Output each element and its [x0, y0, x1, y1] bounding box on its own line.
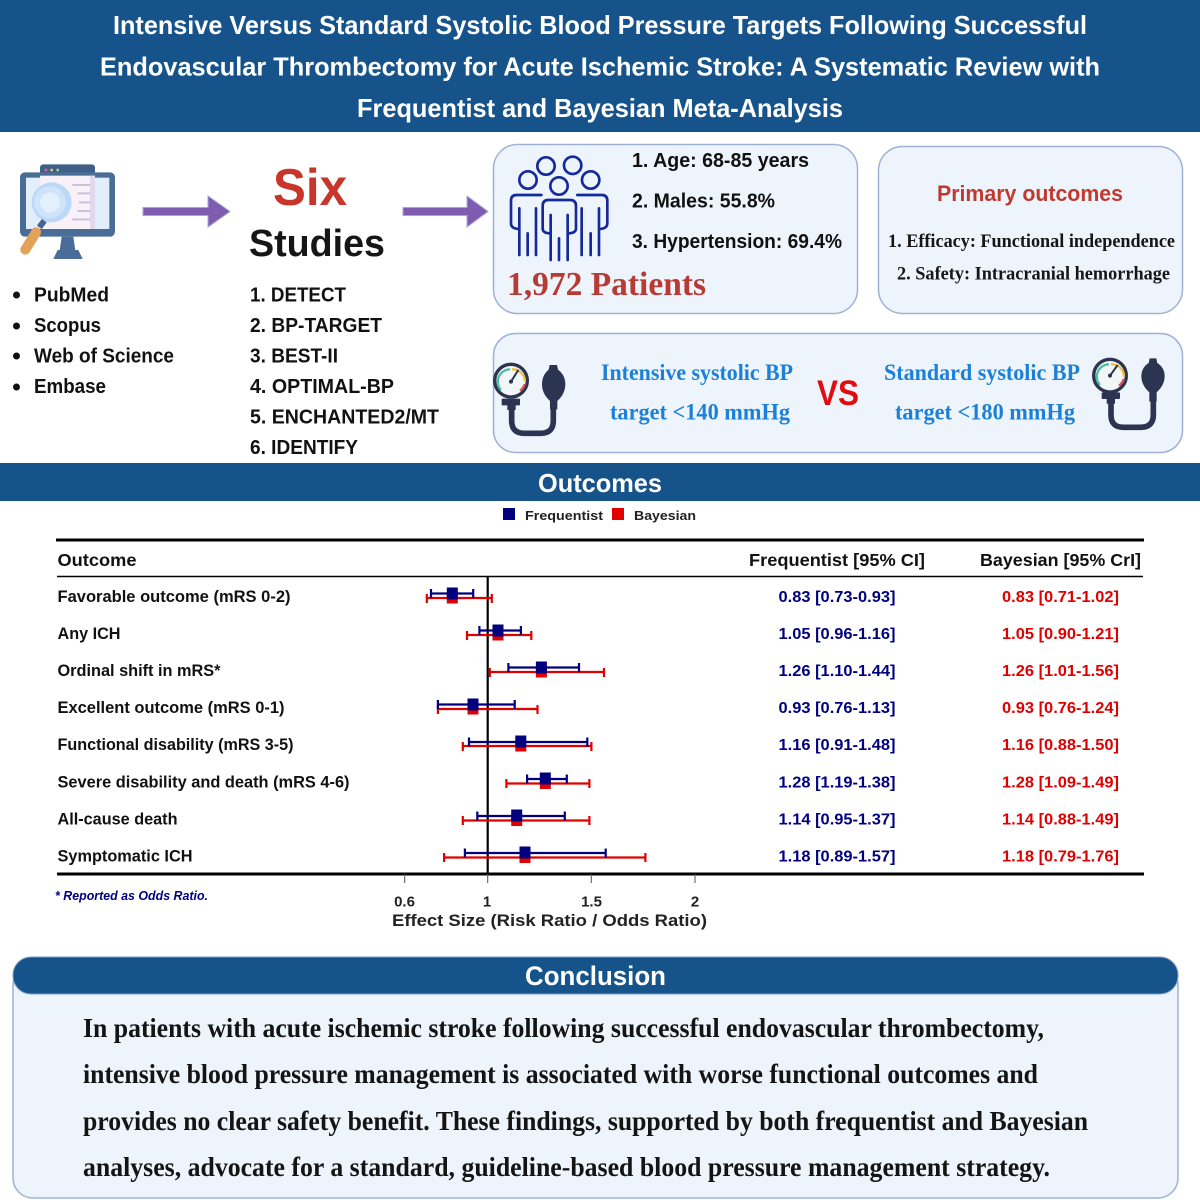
- heading: outcomes: [0, 463, 1200, 501]
- frequentist values: 0.83 [0.73-0.93]: [778, 589, 896, 606]
- database list: Scopus: [34, 315, 101, 337]
- database list: PubMed: [34, 284, 109, 306]
- outcome labels: Any ICH: [58, 625, 120, 643]
- title banner: [0, 0, 1200, 132]
- study list: 6. IDENTIFY: [250, 437, 359, 459]
- legend: [503, 508, 696, 523]
- x axis: 0.6: [394, 894, 415, 910]
- conclusion text: [83, 1013, 1088, 1182]
- frequentist values: 1.05 [0.96-1.16]: [778, 626, 896, 643]
- bayesian values: 1.26 [1.01-1.56]: [1002, 663, 1119, 680]
- study list: 5. ENCHANTED2/MT: [250, 406, 439, 428]
- patient count: 1,972 Patients: [507, 266, 706, 303]
- forest plot: [55, 508, 1144, 930]
- reference line: [487, 577, 489, 874]
- bayesian values: 1.16 [0.88-1.50]: [1002, 737, 1119, 754]
- intensive target text: [601, 360, 793, 424]
- table header: Frequentist [95% CI]: [749, 550, 925, 570]
- frequentist values: 0.93 [0.76-1.13]: [778, 700, 896, 717]
- study list: 4. OPTIMAL-BP: [250, 376, 394, 398]
- heading: six studies: Six: [273, 159, 347, 217]
- patient characteristics: [632, 150, 842, 253]
- icon: right blood pressure gauge: [1094, 358, 1165, 427]
- heading: six studies: [249, 159, 385, 265]
- frequentist intervals: [431, 588, 606, 858]
- x axis: Effect Size (Risk Ratio / Odds Ratio): [392, 911, 707, 930]
- bayesian values: 1.28 [1.09-1.49]: [1002, 774, 1119, 792]
- outcome labels: Excellent outcome (mRS 0-1): [58, 699, 284, 717]
- arrow: search to studies: [143, 196, 230, 227]
- frequentist values: 1.18 [0.89-1.57]: [778, 848, 896, 866]
- study list: 1. DETECT: [250, 284, 346, 306]
- table header: Outcome: [58, 550, 137, 570]
- study list: 3. BEST-II: [250, 346, 338, 368]
- panel: conclusion: [13, 957, 1178, 1198]
- outcome labels: All-cause death: [58, 810, 178, 828]
- patient characteristics: 3. Hypertension: 69.4%: [632, 231, 842, 253]
- study list: [250, 284, 439, 459]
- table rules: [56, 540, 1144, 874]
- bayesian values: 0.83 [0.71-1.02]: [1002, 589, 1119, 606]
- x axis: 1: [483, 894, 491, 910]
- icon: computer with magnifier: [20, 164, 115, 259]
- vs label: VS: [817, 374, 859, 413]
- frequentist values: 1.28 [1.19-1.38]: [778, 774, 896, 792]
- standard target text: target <180 mmHg: [895, 400, 1075, 424]
- title banner: Intensive Versus Standard Systolic Blood Pressure Targets Following Successful: [113, 10, 1087, 40]
- bayesian intervals: [427, 592, 645, 863]
- footnote: * Reported as Odds Ratio.: [55, 889, 208, 903]
- panel: primary outcomes: 1. Efficacy: Functional independence: [888, 231, 1175, 252]
- legend: Frequentist: [525, 508, 604, 523]
- outcome labels: Ordinal shift in mRS*: [58, 662, 221, 680]
- outcome labels: Favorable outcome (mRS 0-2): [58, 588, 290, 606]
- bayesian values: 1.18 [0.79-1.76]: [1002, 848, 1119, 866]
- frequentist values: 1.26 [1.10-1.44]: [778, 663, 896, 680]
- outcome labels: Symptomatic ICH: [58, 848, 192, 866]
- legend: Bayesian: [634, 508, 696, 523]
- frequentist values: 1.14 [0.95-1.37]: [778, 812, 896, 828]
- panel: patients: [494, 144, 858, 314]
- x axis: 2: [691, 894, 699, 910]
- conclusion text: analyses, advocate for a standard, guideline-based blood pressure management strategy.: [83, 1152, 1050, 1182]
- heading: conclusion: [13, 957, 1178, 994]
- conclusion text: intensive blood pressure management is associated with worse functional outcomes and: [83, 1059, 1038, 1089]
- bayesian values: 0.93 [0.76-1.24]: [1002, 700, 1119, 717]
- database list: [13, 284, 174, 398]
- title banner: Frequentist and Bayesian Meta-Analysis: [357, 93, 843, 123]
- arrow: studies to patients: [403, 196, 488, 227]
- title banner: Endovascular Thrombectomy for Acute Ischemic Stroke: A Systematic Review with: [100, 52, 1100, 82]
- standard target text: [884, 360, 1080, 424]
- bayesian values: 1.14 [0.88-1.49]: [1002, 812, 1119, 828]
- panel: primary outcomes: Primary outcomes: [937, 181, 1123, 206]
- conclusion text: provides no clear safety benefit. These findings, supported by both frequentist and Bayesian: [83, 1106, 1088, 1136]
- icon: group of people: [511, 157, 607, 260]
- bayesian values: 1.05 [0.90-1.21]: [1002, 626, 1119, 643]
- patient characteristics: 1. Age: 68-85 years: [632, 150, 809, 172]
- x axis: [392, 874, 707, 930]
- conclusion text: In patients with acute ischemic stroke following successful endovascular thrombectomy,: [83, 1013, 1044, 1043]
- panel: primary outcomes: [878, 146, 1182, 314]
- intensive target text: target <140 mmHg: [610, 400, 790, 424]
- panel: blood pressure comparison: [494, 334, 1182, 452]
- outcome labels: Functional disability (mRS 3-5): [58, 736, 294, 754]
- outcome labels: Severe disability and death (mRS 4-6): [58, 774, 350, 792]
- table header: Bayesian [95% CrI]: [980, 550, 1141, 570]
- heading: six studies: Studies: [249, 223, 385, 265]
- intensive target text: Intensive systolic BP: [601, 360, 793, 385]
- database list: Embase: [34, 376, 106, 398]
- panel: primary outcomes: 2. Safety: Intracranial hemorrhage: [897, 264, 1170, 284]
- bayesian values: [1002, 589, 1119, 866]
- heading: conclusion: Conclusion: [525, 961, 666, 991]
- outcome labels: [58, 588, 350, 866]
- frequentist values: 1.16 [0.91-1.48]: [778, 737, 896, 754]
- x axis: 1.5: [581, 894, 602, 910]
- standard target text: Standard systolic BP: [884, 360, 1080, 385]
- patient characteristics: 2. Males: 55.8%: [632, 190, 775, 212]
- table header: [58, 550, 1141, 570]
- database list: Web of Science: [34, 346, 174, 368]
- heading: outcomes: Outcomes: [538, 468, 662, 498]
- frequentist values: [778, 589, 896, 866]
- icon: left blood pressure gauge: [495, 364, 565, 433]
- study list: 2. BP-TARGET: [250, 315, 382, 337]
